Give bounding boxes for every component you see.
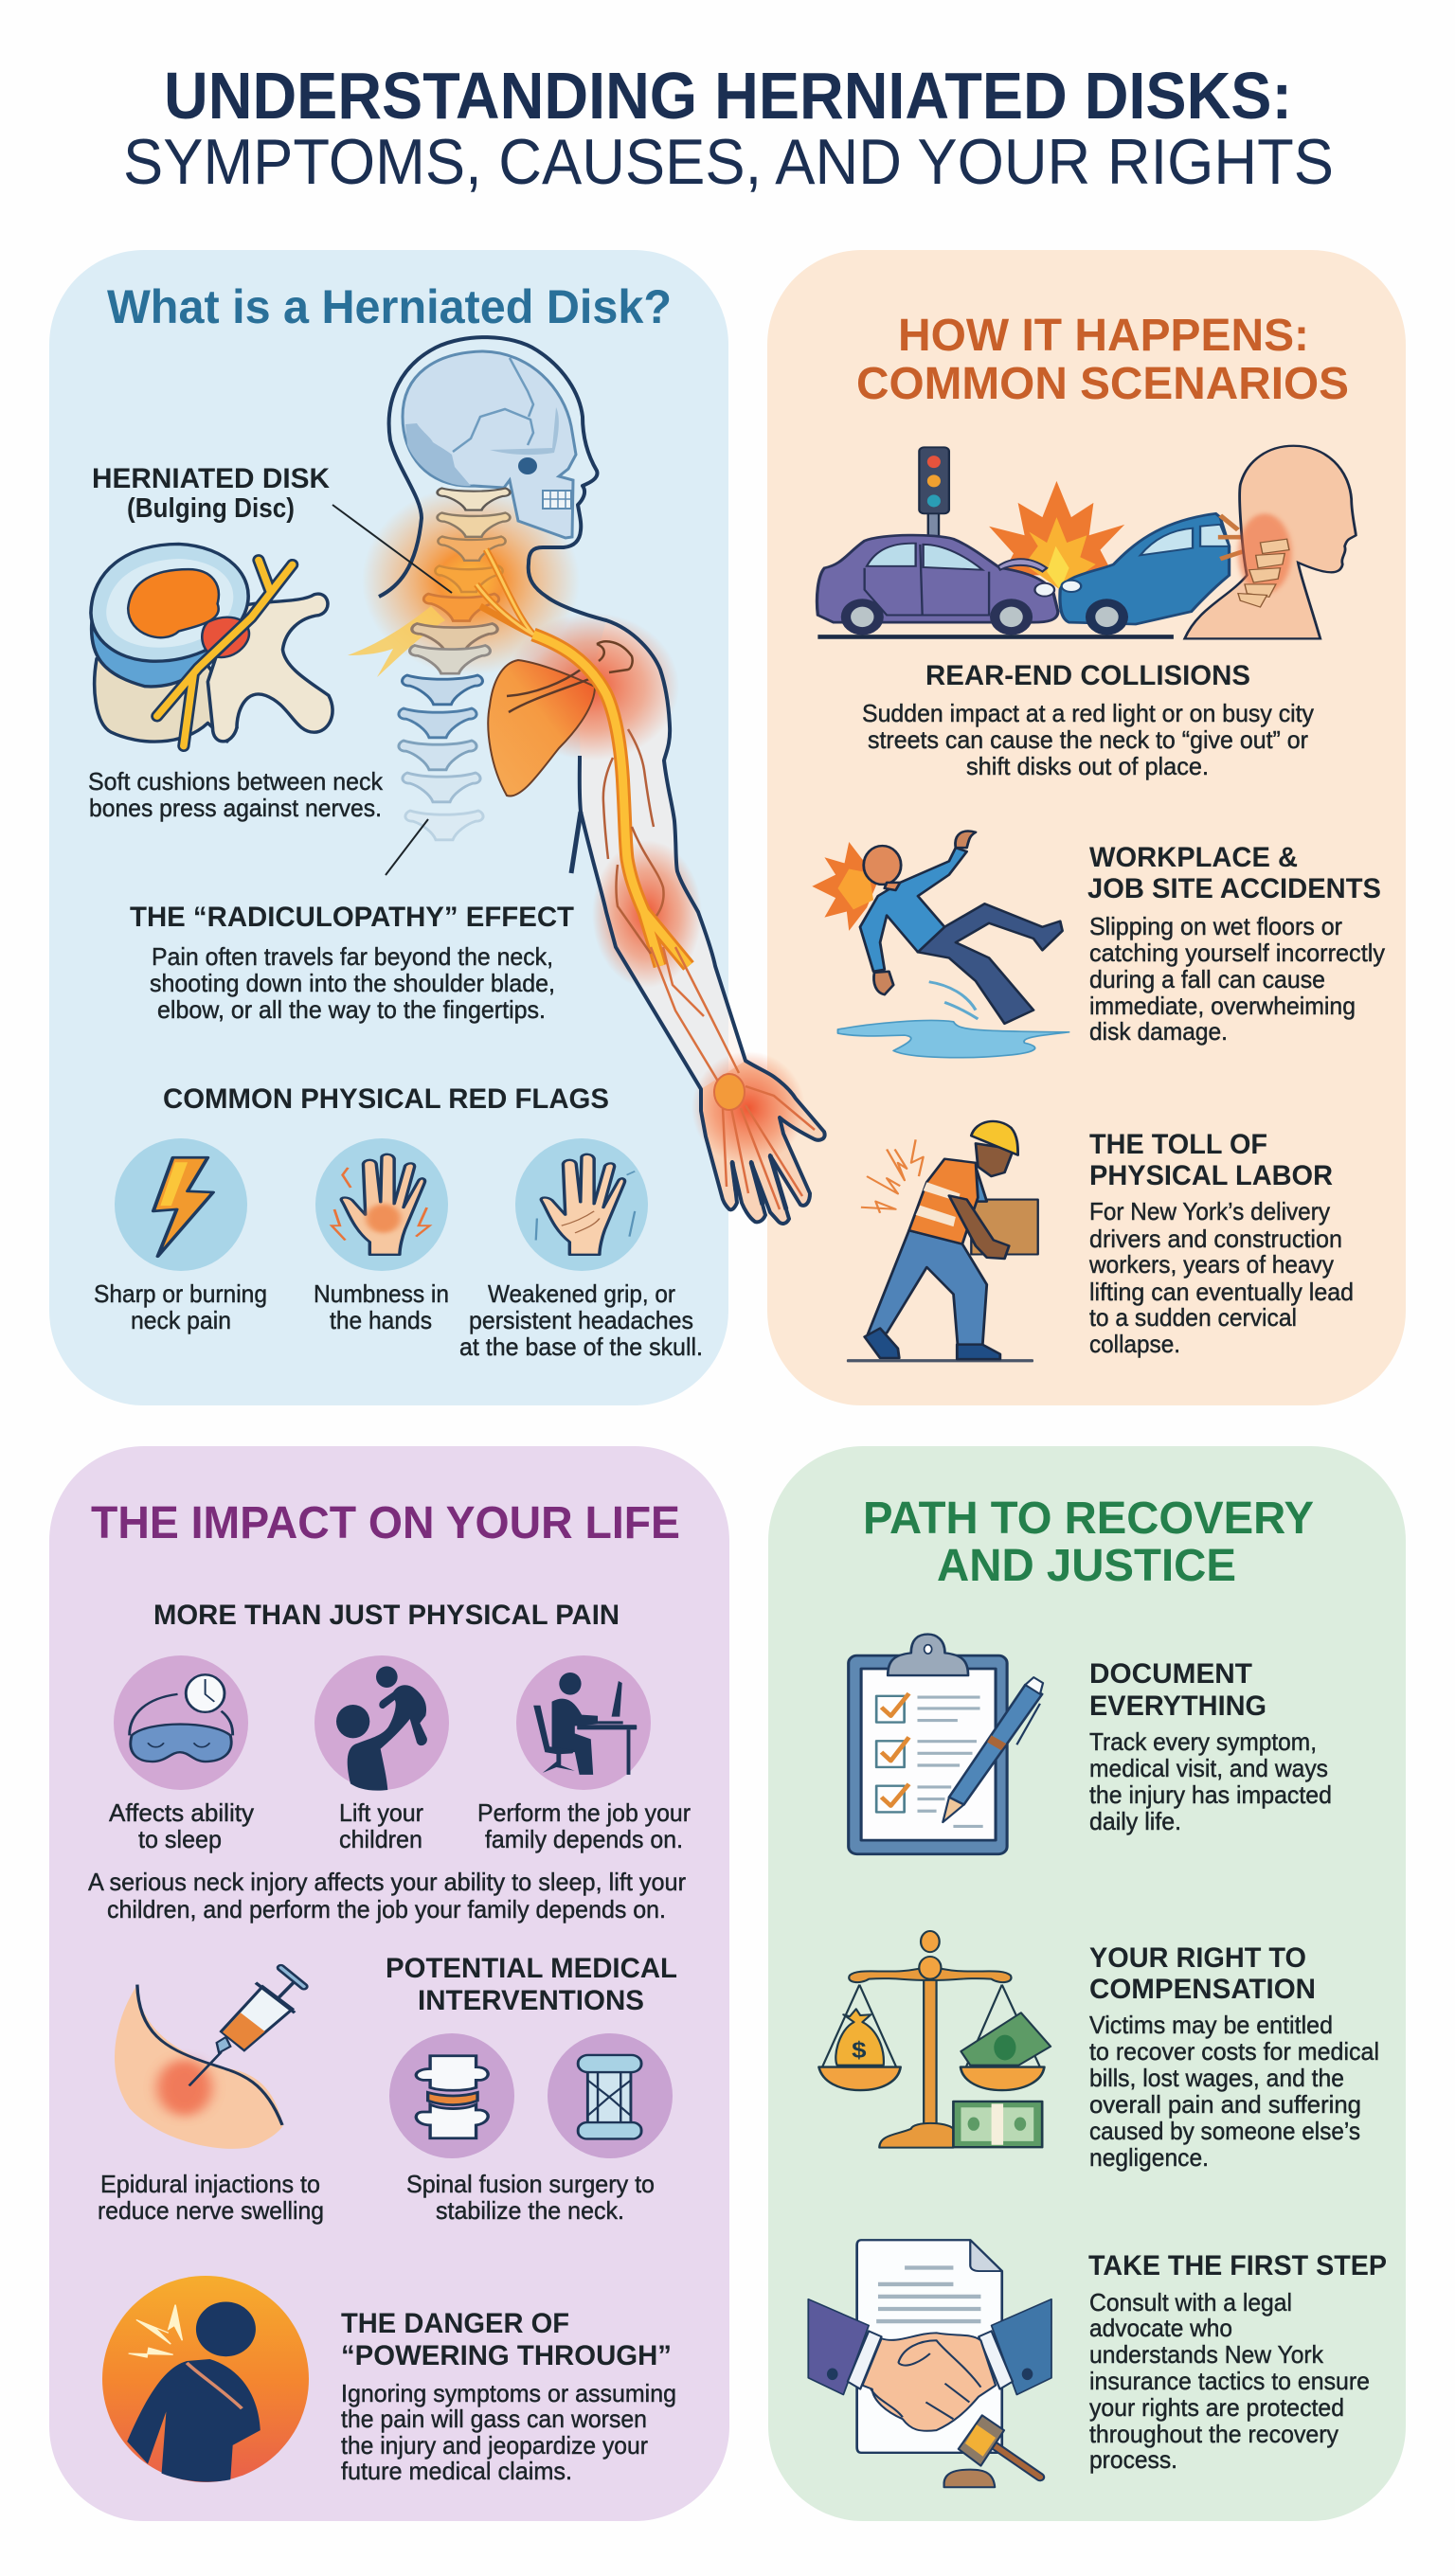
heading: more than just physical pain: MORE THAN JUST PHYSICAL PAIN [153, 1600, 620, 1631]
neck glow [362, 486, 580, 675]
text: take the first step: TAKE THE FIRST STEP [1088, 2250, 1387, 2281]
heading: potential medical interventions: INTERVENTIONS [418, 1985, 644, 2016]
text: radiculopathy effect [130, 902, 574, 1024]
text: workplace and job site accidents: catching yourself incorrectly [1089, 939, 1385, 967]
icon: person at desk [516, 1655, 651, 1790]
text: radiculopathy effect: THE “RADICULOPATHY” EFFECT [130, 902, 574, 933]
illustration: worker lifting box [847, 1121, 1038, 1362]
text: take the first step: insurance tactics to ensure [1089, 2367, 1370, 2395]
text: your right to compensation: to recover costs for medical [1089, 2037, 1379, 2066]
heading: path to recovery and justice [863, 1494, 1314, 1591]
shoulder glow [505, 613, 679, 760]
text: danger of powering through: Ignoring symptoms or assuming [341, 2379, 676, 2407]
text: perform the job: family depends on. [485, 1825, 683, 1853]
body outline [379, 337, 825, 1224]
text: document everything: the injury has impacted [1089, 1780, 1332, 1809]
panel: what is a herniated disk [49, 250, 728, 1405]
text: the toll of physical labor: For New York’s delivery [1089, 1197, 1330, 1225]
illustration: bulging disc [91, 544, 332, 746]
forearm glow [592, 840, 702, 988]
text: workplace and job site accidents: immediate, overwheiming [1089, 992, 1356, 1020]
text: danger of powering through: the injury and jeopardize your [341, 2431, 648, 2460]
icon: numb hand [315, 1138, 448, 1271]
text: sharp or burning neck pain: neck pain [131, 1306, 231, 1334]
text: your right to compensation: negligence. [1089, 2143, 1209, 2172]
illustration: rear-end collision [817, 446, 1356, 639]
heading: how it happens [856, 311, 1349, 409]
icon: weakened hand [515, 1138, 648, 1271]
text: rear-end collisions [862, 660, 1314, 780]
text: danger of powering through [341, 2308, 676, 2485]
text: epidural injections: Epidural injactions to [100, 2170, 320, 2198]
text: weakened grip: at the base of the skull. [459, 1333, 703, 1361]
text: soft cushions: bones press against nerves. [89, 794, 382, 822]
text: sharp or burning neck pain [94, 1279, 267, 1334]
icon: scales of justice with money [818, 1931, 1051, 2148]
text: serious neck injury summary [88, 1868, 686, 1923]
panel: the impact on your life [49, 1446, 729, 2521]
radiating rays [348, 606, 445, 677]
text: danger of powering through: future medical claims. [341, 2457, 572, 2485]
text: the toll of physical labor: THE TOLL OF [1089, 1129, 1267, 1160]
panel: path to recovery and justice [768, 1446, 1406, 2521]
title: UNDERSTANDING HERNIATED DISKS: [164, 59, 1292, 133]
heading: path to recovery and justice: PATH TO RECOVERY [863, 1494, 1314, 1544]
text: the toll of physical labor: collapse. [1089, 1330, 1180, 1358]
hand glow [692, 1051, 805, 1165]
text: numbness in the hands [314, 1279, 449, 1334]
text: your right to compensation: COMPENSATION [1089, 1974, 1316, 2005]
text: workplace and job site accidents: disk damage. [1089, 1017, 1228, 1046]
text: rear-end collisions: Sudden impact at a red light or on busy city [862, 699, 1314, 727]
title: SYMPTOMS, CAUSES, AND YOUR RIGHTS [123, 126, 1334, 198]
text: perform the job: Perform the job your [477, 1798, 691, 1827]
text: epidural injections: reduce nerve swelling [98, 2196, 324, 2225]
text: lift your children: children [339, 1825, 422, 1853]
text: danger of powering through: the pain will gass can worsen [341, 2405, 647, 2433]
text: weakened grip: Weakened grip, or [488, 1279, 675, 1308]
text: the toll of physical labor: PHYSICAL LABOR [1089, 1160, 1333, 1191]
text: the toll of physical labor: drivers and construction [1089, 1225, 1342, 1253]
label: herniated disk [92, 463, 330, 524]
heading: potential medical interventions: POTENTIAL MEDICAL [386, 1953, 677, 1984]
text: epidural injections [98, 2170, 324, 2225]
text: danger of powering through: “POWERING THROUGH” [341, 2340, 672, 2371]
text: affects ability to sleep: to sleep [138, 1825, 222, 1853]
text: perform the job [477, 1798, 691, 1853]
icon: person in neck pain [102, 2276, 309, 2482]
text: take the first step: process. [1089, 2445, 1177, 2474]
text: take the first step: Consult with a legal [1089, 2288, 1292, 2317]
icon: lightning bolt [115, 1138, 247, 1271]
illustration: person slipping on wet floor [812, 832, 1069, 1058]
text: take the first step: understands New York [1089, 2340, 1324, 2369]
skull [403, 351, 576, 538]
text: your right to compensation: YOUR RIGHT TO [1089, 1942, 1306, 1974]
text: spinal fusion: Spinal fusion surgery to [406, 2170, 655, 2198]
pointer line: herniated disk [332, 505, 452, 593]
text: document everything: Track every symptom, [1089, 1727, 1317, 1756]
text: take the first step: throughout the recovery [1089, 2420, 1338, 2448]
text: workplace and job site accidents: during a fall can cause [1089, 965, 1325, 993]
heading: path to recovery and justice: AND JUSTICE [937, 1541, 1236, 1591]
text: document everything: daily life. [1089, 1807, 1181, 1835]
text: your right to compensation [1089, 1942, 1379, 2172]
illustration: epidural injection [115, 1968, 304, 2149]
text: workplace and job site accidents [1087, 842, 1385, 1046]
illustration: anatomical figure with radiating nerve pain [332, 337, 825, 1224]
icon: lifting a child [314, 1655, 449, 1791]
text: rear-end collisions: shift disks out of place. [966, 752, 1209, 780]
text: take the first step [1088, 2250, 1387, 2474]
heading: how it happens: COMMON SCENARIOS [856, 359, 1349, 409]
text: radiculopathy effect: elbow, or all the way to the fingertips. [157, 995, 546, 1024]
heading: the impact on your life: THE IMPACT ON YOUR LIFE [91, 1498, 680, 1548]
heading: what is a herniated disk: What is a Herniated Disk? [107, 280, 672, 333]
shoulder blade [488, 660, 595, 796]
text: lift your children: Lift your [339, 1798, 423, 1827]
heading: potential medical interventions [386, 1953, 677, 2016]
icon: handshake over document with gavel [808, 2240, 1051, 2487]
text: sharp or burning neck pain: Sharp or burning [94, 1279, 267, 1308]
text: your right to compensation: Victims may be entitled [1089, 2011, 1333, 2039]
text: soft cushions [88, 767, 384, 822]
title [123, 59, 1334, 198]
text: workplace and job site accidents: Slipping on wet floors or [1089, 912, 1342, 940]
icon: scales of justice with money: $ [852, 2036, 867, 2063]
text: document everything: medical visit, and ways [1089, 1754, 1328, 1782]
heading: how it happens: HOW IT HAPPENS: [898, 311, 1309, 361]
icon: spinal cage implant [548, 2033, 673, 2158]
text: radiculopathy effect: shooting down into the shoulder blade, [150, 969, 555, 997]
text: workplace and job site accidents: WORKPLACE & [1089, 842, 1298, 873]
text: weakened grip [459, 1279, 703, 1361]
text: serious neck injury summary: A serious neck injory affects your ability to sleep, lift your [88, 1868, 686, 1896]
text: weakened grip: persistent headaches [469, 1306, 693, 1334]
text: the toll of physical labor: lifting can eventually lead [1089, 1278, 1354, 1306]
cervical and thoracic spine [399, 489, 510, 840]
text: your right to compensation: overall pain and suffering [1089, 2090, 1361, 2119]
text: affects ability to sleep: Affects ability [109, 1798, 254, 1827]
heading: common physical red flags: COMMON PHYSICAL RED FLAGS [163, 1083, 609, 1115]
text: spinal fusion [406, 2170, 655, 2225]
text: numbness in the hands: Numbness in [314, 1279, 449, 1308]
text: your right to compensation: bills, lost wages, and the [1089, 2064, 1344, 2092]
text: soft cushions: Soft cushions between neck [88, 767, 384, 796]
text: numbness in the hands: the hands [330, 1306, 432, 1334]
text: workplace and job site accidents: JOB SITE ACCIDENTS [1087, 873, 1381, 904]
text: document everything: DOCUMENT [1089, 1658, 1252, 1690]
icon: spine with disc [389, 2033, 514, 2158]
icon: sleep mask and clock [114, 1655, 248, 1790]
text: serious neck injury summary: children, and perform the job your family depends on. [107, 1895, 666, 1923]
text: document everything: EVERYTHING [1089, 1690, 1266, 1722]
text: lift your children [339, 1798, 423, 1853]
label: herniated disk: HERNIATED DISK [92, 463, 330, 494]
text: take the first step: your rights are protected [1089, 2393, 1344, 2422]
text: danger of powering through: THE DANGER OF [341, 2308, 569, 2339]
pointer line: radiculopathy [386, 819, 428, 875]
panel: how it happens [767, 250, 1406, 1405]
text: rear-end collisions: REAR-END COLLISIONS [925, 660, 1250, 691]
text: the toll of physical labor: workers, years of heavy [1088, 1250, 1334, 1279]
text: take the first step: advocate who [1089, 2314, 1232, 2342]
text: radiculopathy effect: Pain often travels far beyond the neck, [152, 942, 553, 971]
text: rear-end collisions: streets can cause the neck to “give out” or [868, 725, 1308, 754]
text: document everything [1089, 1658, 1332, 1835]
label: herniated disk: (Bulging Disc) [127, 493, 295, 524]
icon: clipboard and pen [849, 1635, 1043, 1854]
text: the toll of physical labor [1088, 1129, 1354, 1358]
text: spinal fusion: stabilize the neck. [436, 2196, 624, 2225]
text: the toll of physical labor: to a sudden cervical [1089, 1303, 1297, 1332]
nerves [476, 549, 689, 966]
text: your right to compensation: caused by someone else’s [1089, 2117, 1360, 2145]
text: affects ability to sleep [109, 1798, 254, 1853]
